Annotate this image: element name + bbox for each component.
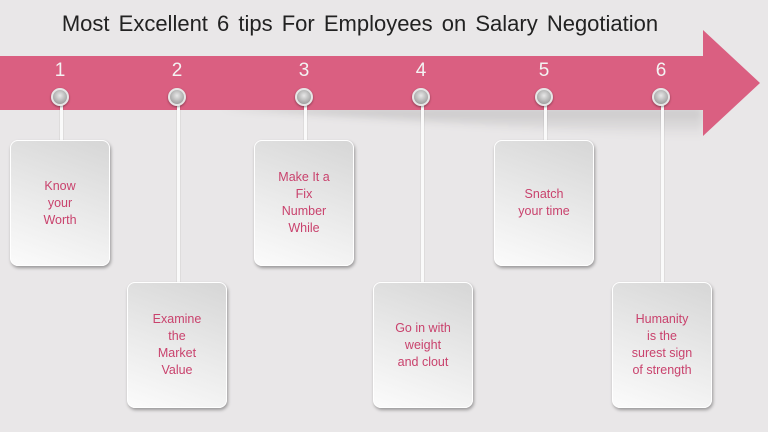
card 3: [254, 140, 354, 266]
card 1: Know: [44, 178, 76, 192]
card 1: Worth: [43, 212, 77, 226]
card 6: is the: [647, 329, 677, 343]
card 3: While: [288, 221, 320, 235]
card 6: of strength: [632, 363, 692, 377]
card 2: the: [168, 329, 186, 343]
card 6: Humanity: [636, 312, 688, 326]
card 5: Snatch: [525, 187, 563, 201]
arrow: [0, 30, 760, 136]
card 6: surest sign: [632, 346, 692, 360]
card 5: [494, 140, 594, 266]
text: 5: [539, 60, 549, 81]
card 4: and clout: [398, 354, 448, 368]
card 6: [612, 282, 712, 408]
number labels: [55, 60, 666, 81]
card 5: your time: [518, 204, 570, 218]
text: 2: [172, 60, 182, 81]
card 3: Number: [282, 204, 326, 218]
title: Most Excellent 6 tips For Employees on Salary Negotiation: [62, 11, 658, 36]
card 2: Examine: [153, 312, 201, 326]
card 4: Go in with: [395, 320, 451, 334]
card 2: Market: [158, 346, 196, 360]
card 1: your: [48, 196, 72, 210]
text: 6: [656, 60, 666, 81]
pins: [50, 88, 672, 108]
card 3: Make It a: [278, 170, 330, 184]
card 1: [10, 140, 110, 266]
card 2: [127, 282, 227, 408]
text: 4: [416, 60, 426, 81]
card 4: [373, 282, 473, 408]
card 4: weight: [405, 338, 441, 352]
connector lines: [60, 106, 664, 282]
card 3: Fix: [296, 187, 312, 201]
text: 3: [299, 60, 309, 81]
card 2: Value: [161, 363, 193, 377]
text: 1: [55, 60, 65, 81]
